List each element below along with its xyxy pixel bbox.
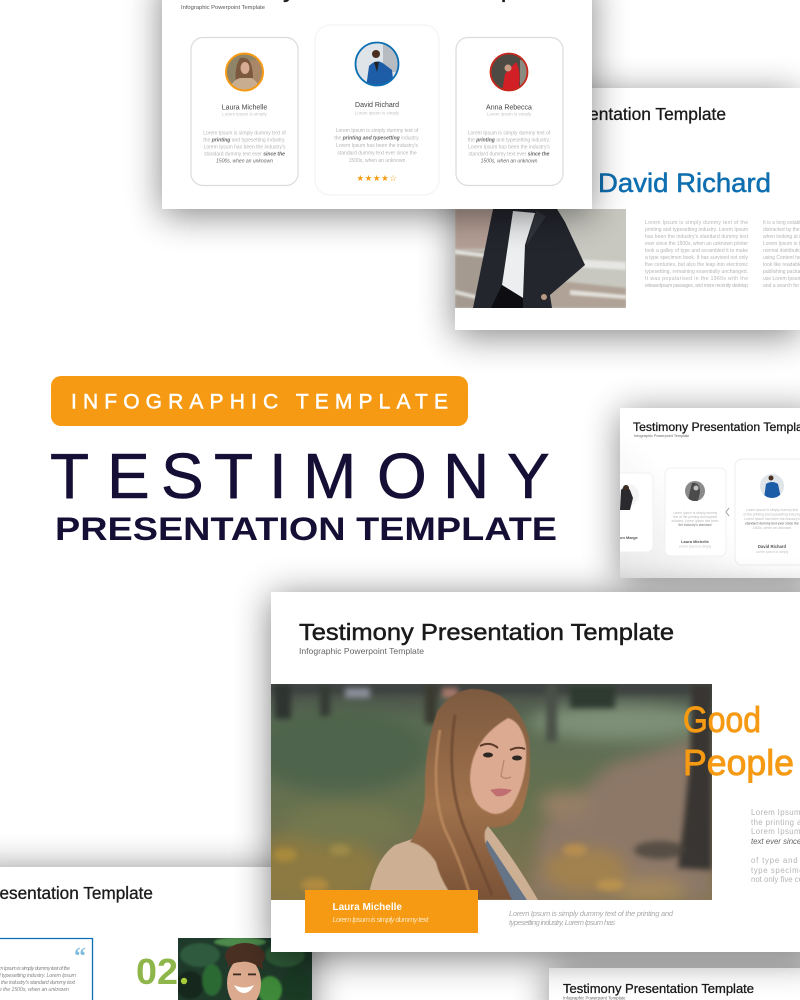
slide: bottom right bbox=[549, 966, 800, 1000]
coat bbox=[368, 826, 538, 900]
number 02: 02 bbox=[136, 951, 178, 992]
testimonial text: Anna: the printing and typesetting industry. bbox=[468, 138, 550, 144]
slide title: Testimony Presentation Template bbox=[563, 982, 754, 996]
testimonial text: Anna: 1500s, when an unknown bbox=[481, 158, 538, 164]
heading: Good People: Good bbox=[683, 699, 761, 740]
caption: Lorem Ipsum is simply dummy text of the printing and bbox=[509, 909, 674, 918]
card: Laura Michelle bbox=[191, 38, 298, 186]
testimonial text: Laura: standard dummy text ever since the bbox=[204, 152, 285, 158]
name heading: David Richard bbox=[598, 168, 771, 198]
name box bbox=[305, 890, 478, 933]
card: Laura Michelle: text of the printing and typeset bbox=[673, 515, 717, 519]
photo: smiling man with foliage bbox=[176, 937, 312, 1000]
quote box bbox=[0, 938, 92, 1000]
body text column 1 bbox=[645, 220, 749, 289]
testimonial text: Anna bbox=[468, 130, 551, 164]
role: Anna: Lorem ipsum is simply bbox=[487, 112, 532, 116]
card: David Richard: David Richard bbox=[758, 544, 787, 549]
body text column 1: Lorem Ipsum is simply dummy text of the bbox=[645, 220, 748, 226]
card: left partial: on Marge bbox=[620, 535, 639, 540]
photo: man in suit bbox=[455, 209, 626, 308]
avatar: David bbox=[355, 42, 399, 88]
body text column 1: ever since the 1500s, when an unknown printer bbox=[645, 241, 748, 247]
card: David Richard: Lorem Ipsum has been the industry's bbox=[744, 517, 800, 521]
slide title: Testimony Presentation Template bbox=[470, 104, 726, 124]
slide: David Richard profile bbox=[455, 88, 800, 336]
card: Laura Michelle: industry. Lorem Ipsum has been bbox=[672, 519, 719, 523]
role: David: Lorem ipsum is simply bbox=[355, 110, 400, 116]
number dot bbox=[181, 978, 187, 984]
testimonial text: Anna: standard dummy text ever since the bbox=[469, 152, 550, 158]
card: Laura Michelle: Lorem ipsum is simply bbox=[679, 544, 712, 548]
quote text bbox=[0, 966, 76, 993]
card: David Richard: 1500s, when an unknown bbox=[753, 526, 791, 530]
testimonial text: Laura bbox=[203, 130, 286, 164]
subtitle: Presentation Template: PRESENTATION TEMPLATE bbox=[55, 511, 557, 547]
body text column 1: typesetting, remaining essentially unchanged. bbox=[645, 269, 748, 275]
body text right bbox=[751, 808, 800, 884]
card: Laura Michelle: the industry's standard bbox=[678, 523, 712, 527]
heading: Good People: People bbox=[683, 742, 794, 783]
card: David Richard: standard dummy text ever since the bbox=[745, 522, 799, 526]
slide title: Testimony Presentation Template bbox=[299, 619, 674, 645]
icon: quotation mark: “ bbox=[74, 944, 86, 970]
avatar: Laura greyscale bbox=[685, 481, 705, 501]
body text column 1: a type specimen book. It has survived not only bbox=[645, 255, 748, 261]
facial features bbox=[480, 744, 525, 796]
card: Laura Michelle: Lorem Ipsum is simply dummy bbox=[673, 511, 718, 515]
slide subtitle: Infographic Powerpoint Template bbox=[299, 646, 424, 656]
body text column 1: took a galley of type and scrambled it to make bbox=[645, 248, 748, 254]
body text column 1: five centuries, but also the leap into electronic bbox=[645, 262, 748, 268]
slide: bottom left with quote and portrait bbox=[0, 867, 312, 1000]
slide subtitle: Infographic Powerpoint Template bbox=[634, 434, 689, 438]
card: David Richard bbox=[315, 25, 439, 195]
role: Laura: Lorem ipsum is simply bbox=[222, 112, 268, 116]
testimonial text: David: Lorem Ipsum is simply dummy text of bbox=[336, 128, 419, 134]
name: David: David Richard bbox=[355, 102, 399, 109]
card: left partial bbox=[620, 472, 654, 552]
testimonial text: Laura: Lorem Ipsum has been the industry's bbox=[204, 144, 286, 150]
testimonial text: Laura: 1500s, when an unknown bbox=[216, 158, 273, 164]
testimonial text: David: Lorem Ipsum has been the industry's bbox=[336, 143, 418, 149]
badge: Infographic Template: INFOGRAPHIC TEMPLATE bbox=[71, 390, 448, 414]
role: Lorem Ipsum is simply dummy text bbox=[332, 915, 429, 924]
card: David Richard: of the printing and typesetting industry bbox=[743, 512, 800, 516]
body text column 1: printing and typesetting industry. Lorem Ipsum bbox=[645, 227, 748, 233]
avatar: Laura bbox=[225, 52, 266, 92]
title: Testimony: TESTIMONY bbox=[50, 440, 550, 512]
face bbox=[470, 718, 526, 814]
icon: left chevron bbox=[726, 508, 729, 516]
body text column 1: has been the industry's standard dummy text bbox=[645, 234, 749, 240]
slide: main Laura Michelle feature bbox=[240, 592, 800, 958]
card: Anna Rebecca bbox=[456, 38, 563, 186]
badge: Infographic Template bbox=[51, 376, 468, 426]
body text column 1: releaseIpsum passages, and more recently desktop bbox=[645, 283, 748, 289]
slide: testimonial carousel bbox=[590, 408, 800, 582]
testimonial text: David: standard dummy text ever since the bbox=[337, 150, 417, 156]
slide: three testimonial cards bbox=[162, 0, 592, 215]
photo: woman in park bbox=[240, 684, 712, 906]
slide subtitle: Infographic Powerpoint Template bbox=[181, 5, 265, 11]
body text column 1: It was popularised in the 1960s with the bbox=[645, 276, 748, 282]
heading: Good People bbox=[683, 699, 794, 783]
testimonial text: David bbox=[334, 128, 420, 164]
hair bbox=[410, 689, 530, 900]
star rating: ★★★★☆ bbox=[356, 174, 398, 184]
testimonial text: Anna: Lorem Ipsum has been the industry's bbox=[468, 144, 550, 150]
testimonial text: David: the printing and typesetting industry. bbox=[334, 136, 420, 142]
card: Laura Michelle bbox=[665, 468, 726, 556]
caption: typesetting industry. Lorem Ipsum has bbox=[509, 918, 615, 927]
caption bbox=[509, 909, 674, 927]
name: Laura: Laura Michelle bbox=[222, 104, 267, 112]
card: Laura Michelle: Laura Michelle bbox=[681, 539, 710, 544]
name: Anna: Anna Rebecca bbox=[486, 104, 532, 112]
testimonial text: Laura: Lorem Ipsum is simply dummy text of bbox=[203, 130, 286, 136]
testimonial text: David: 1500s, when an unknown bbox=[349, 158, 406, 164]
card: David Richard: Lorem ipsum is simply bbox=[756, 550, 789, 554]
name: Laura Michelle bbox=[332, 902, 402, 913]
avatar: David colour bbox=[760, 474, 784, 498]
slide: bottom small fragment bbox=[312, 995, 500, 1000]
testimonial text: Laura: the printing and typesetting industry. bbox=[203, 138, 286, 144]
card: David Richard: Lorem Ipsum is simply dummy text bbox=[746, 508, 798, 512]
avatar: Anna bbox=[490, 52, 530, 92]
card: David Richard bbox=[735, 459, 800, 565]
testimonial text: Anna: Lorem Ipsum is simply dummy text of bbox=[468, 130, 551, 136]
body text column 2 bbox=[763, 220, 800, 289]
